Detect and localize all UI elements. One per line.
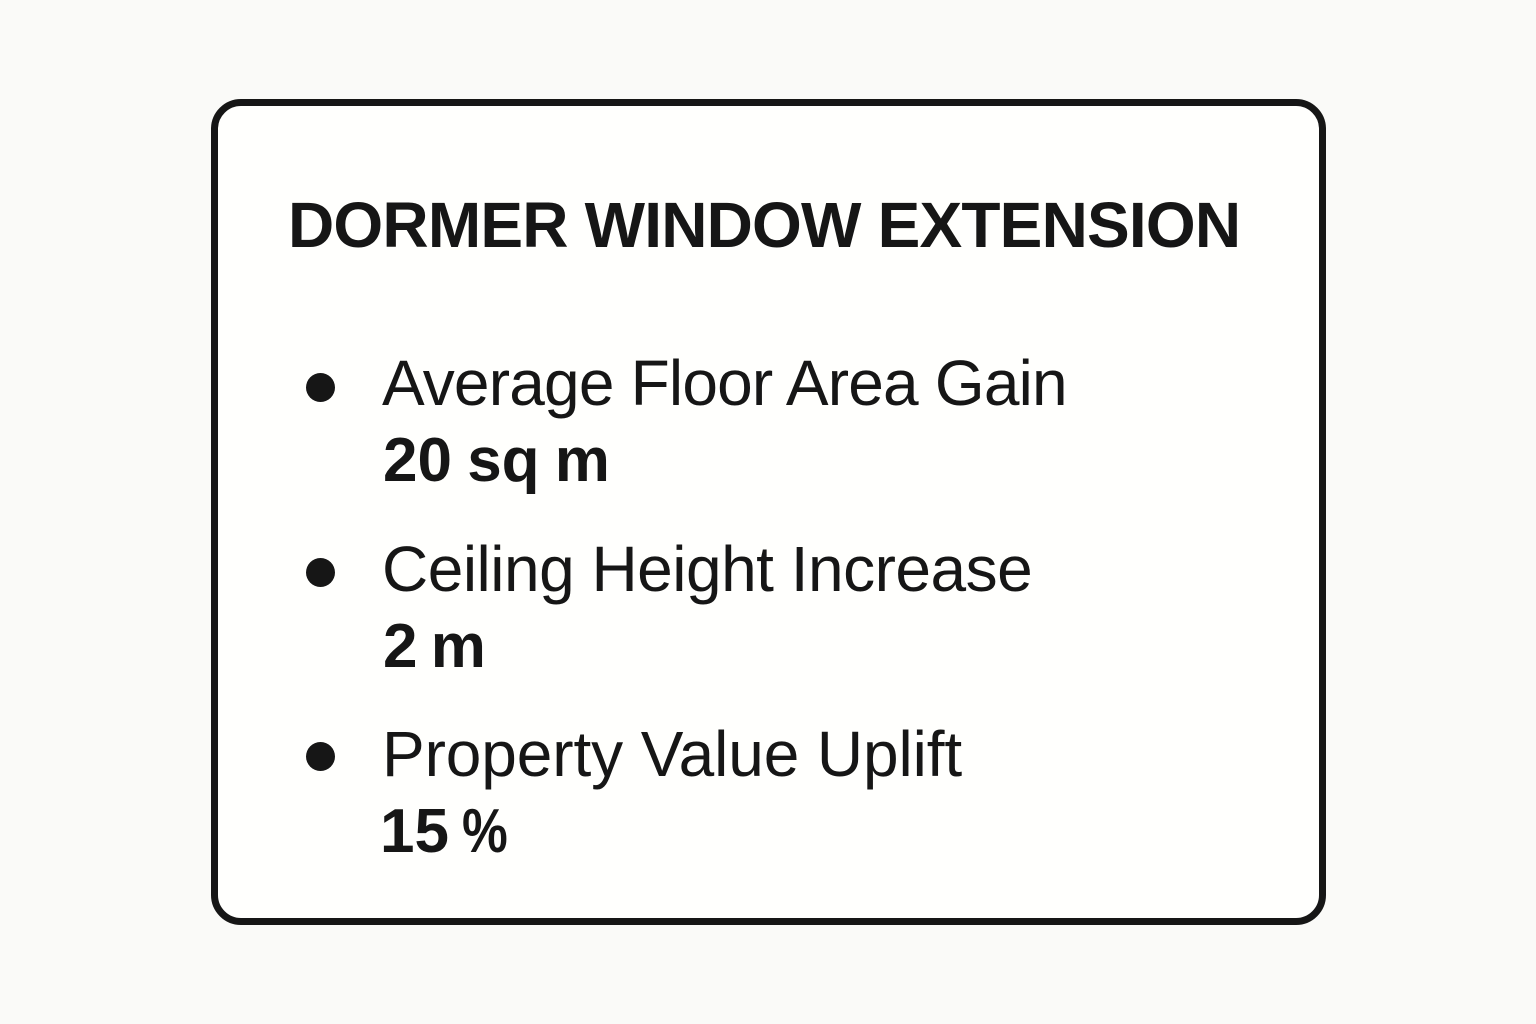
icon: bullet 1	[306, 373, 335, 402]
text: property value figure	[380, 797, 508, 866]
text: property value label: Property Value Uplift	[382, 718, 962, 790]
text: ceiling height label: Ceiling Height Increase	[382, 533, 1032, 605]
panel: dormer window extension card	[211, 99, 1326, 925]
text: ceiling height value: 2 m	[383, 612, 486, 681]
text: property value figure: 15	[380, 797, 449, 866]
title: DORMER WINDOW EXTENSION	[288, 189, 1240, 261]
text: floor area label: Average Floor Area Gain	[382, 347, 1067, 419]
icon: bullet 3	[306, 742, 335, 771]
icon: bullet 2	[306, 558, 335, 587]
text: floor area value: 20 sq m	[383, 426, 610, 495]
text: property value figure: %	[462, 797, 508, 866]
